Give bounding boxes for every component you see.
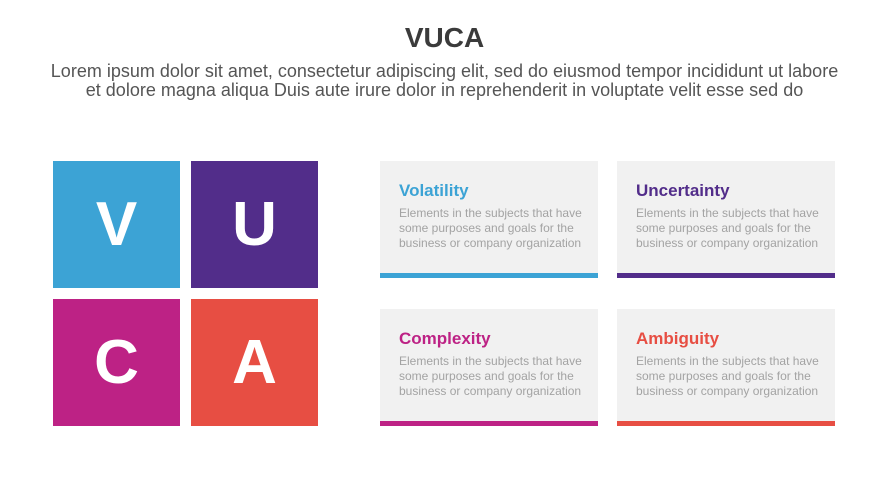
card: Ambiguity xyxy=(617,309,835,426)
square U: U xyxy=(232,190,277,259)
card: Volatility xyxy=(380,161,598,278)
square V: V xyxy=(96,190,137,259)
card: Uncertainty: Uncertainty xyxy=(636,181,730,200)
card: Complexity: Complexity xyxy=(399,329,491,348)
subtitle xyxy=(51,61,838,100)
square C: C xyxy=(94,328,139,397)
subtitle: et dolore magna aliqua Duis aute irure dolor in reprehenderit in voluptate velit esse sed do xyxy=(86,80,803,100)
card: Ambiguity: Ambiguity xyxy=(636,329,719,348)
subtitle: Lorem ipsum dolor sit amet, consectetur adipiscing elit, sed do eiusmod tempor incididunt ut labore xyxy=(51,61,838,81)
card: Complexity xyxy=(380,309,598,426)
title: VUCA xyxy=(405,22,484,53)
card: Volatility: Elements in the subjects that have some purposes and goals for the business or company organization xyxy=(399,206,582,250)
card: Uncertainty xyxy=(617,161,835,278)
card: Volatility: Volatility xyxy=(399,181,469,200)
square A xyxy=(191,299,318,426)
card: Complexity: Elements in the subjects that have some purposes and goals for the business or company organization xyxy=(399,354,582,398)
square C xyxy=(53,299,180,426)
card: Ambiguity: Elements in the subjects that have some purposes and goals for the business or company organization xyxy=(636,354,819,398)
square A: A xyxy=(232,328,277,397)
square V xyxy=(53,161,180,288)
card: Uncertainty: Elements in the subjects that have some purposes and goals for the business or company organization xyxy=(636,206,819,250)
square U xyxy=(191,161,318,288)
